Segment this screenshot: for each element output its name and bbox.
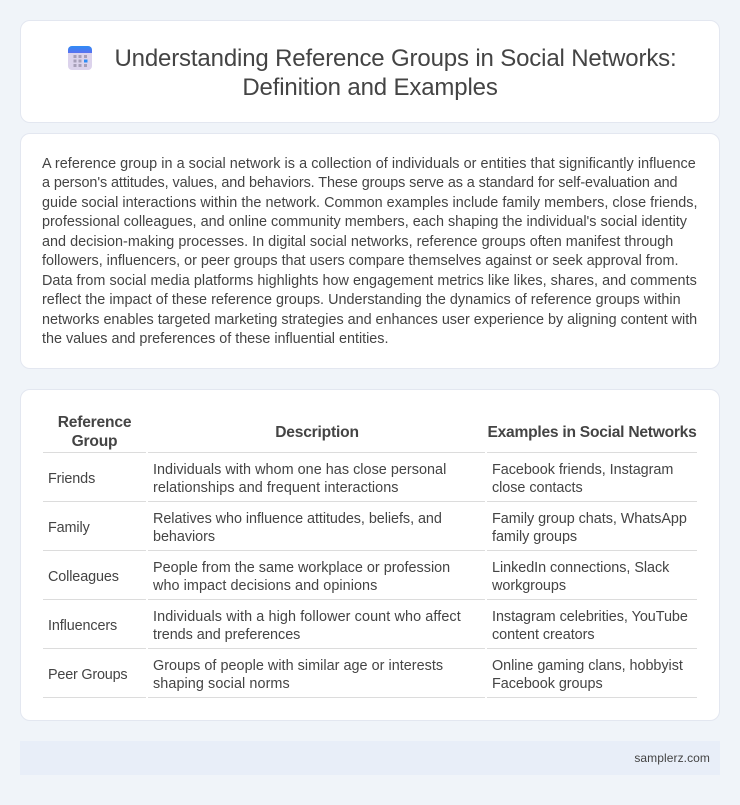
row: Family: Family group chats, WhatsApp [492, 511, 687, 527]
row: Family [43, 501, 697, 545]
row: Colleagues: workgroups [492, 578, 566, 594]
intro text: and decision-making processes. In digital social networks, reference groups often manifest through [42, 234, 673, 250]
row: Friends [43, 452, 697, 496]
row: Influencers: trends and preferences [153, 627, 300, 643]
row: Peer Groups: shaping social norms [153, 676, 290, 692]
row: Colleagues: Colleagues [48, 569, 119, 585]
table header [58, 414, 697, 450]
row: Peer Groups: Peer Groups [48, 667, 127, 683]
intro text: a person's attitudes, values, and behaviors. These groups serve as a standard for self-evaluation and [42, 175, 677, 191]
intro text: professional colleagues, and online community members, each shaping the individual's social identity [42, 214, 687, 230]
table header: Reference [58, 414, 131, 431]
footer bar [20, 741, 720, 775]
row: Colleagues [43, 550, 697, 594]
row: Friends: Friends [48, 471, 95, 487]
intro text: networks enables targeted marketing strategies and enhances user experience by aligning content with [42, 312, 697, 328]
row: Family: Relatives who influence attitudes, beliefs, and [153, 511, 442, 527]
row: Family: family groups [492, 529, 577, 545]
title heading: Definition and Examples [242, 74, 498, 101]
row: Peer Groups: Groups of people with similar age or interests [153, 658, 443, 674]
footer credit: samplerz.com [634, 751, 710, 765]
row: Family: behaviors [153, 529, 215, 545]
row: Influencers [43, 599, 697, 643]
row: Friends: close contacts [492, 480, 583, 496]
panel: intro paragraph [20, 133, 720, 369]
panel: title [20, 20, 720, 123]
table header: Description [275, 424, 359, 441]
intro text: the values and preferences of these influential entities. [42, 331, 388, 347]
icon: calendar [68, 46, 92, 70]
row: Influencers: Influencers [48, 618, 117, 634]
row: Family: Family [48, 520, 90, 536]
row: Colleagues: LinkedIn connections, Slack [492, 560, 669, 576]
table header: Examples in Social Networks [487, 424, 697, 441]
row: Influencers: content creators [492, 627, 595, 643]
intro text: guide social interactions within the network. Common examples include family members, close friends, [42, 195, 698, 211]
row: Peer Groups: Online gaming clans, hobbyist [492, 658, 683, 674]
title heading [114, 45, 677, 101]
row: Colleagues: People from the same workplace or profession [153, 560, 450, 576]
row: Friends: Facebook friends, Instagram [492, 462, 673, 478]
row: Friends: relationships and frequent interactions [153, 480, 399, 496]
row: Influencers: Individuals with a high follower count who affect [153, 609, 461, 625]
intro text: Data from social media platforms highlights how engagement metrics like likes, shares, and comments [42, 273, 697, 289]
table header: Group [72, 433, 117, 450]
row: Influencers: Instagram celebrities, YouTube [492, 609, 688, 625]
intro text: A reference group in a social network is a collection of individuals or entities that significantly influence [42, 156, 696, 172]
row: Friends: Individuals with whom one has close personal [153, 462, 446, 478]
row: Peer Groups [43, 648, 697, 698]
panel: table [20, 389, 720, 721]
intro text: reflect the impact of these reference groups. Understanding the dynamics of reference groups within [42, 292, 681, 308]
title heading: Understanding Reference Groups in Social Networks: [114, 45, 677, 72]
intro text [42, 156, 698, 347]
row: Colleagues: who impact decisions and opinions [153, 578, 377, 594]
row: Peer Groups: Facebook groups [492, 676, 603, 692]
intro text: followers, influencers, or peer groups that users compare themselves against or seek approval from. [42, 253, 678, 269]
